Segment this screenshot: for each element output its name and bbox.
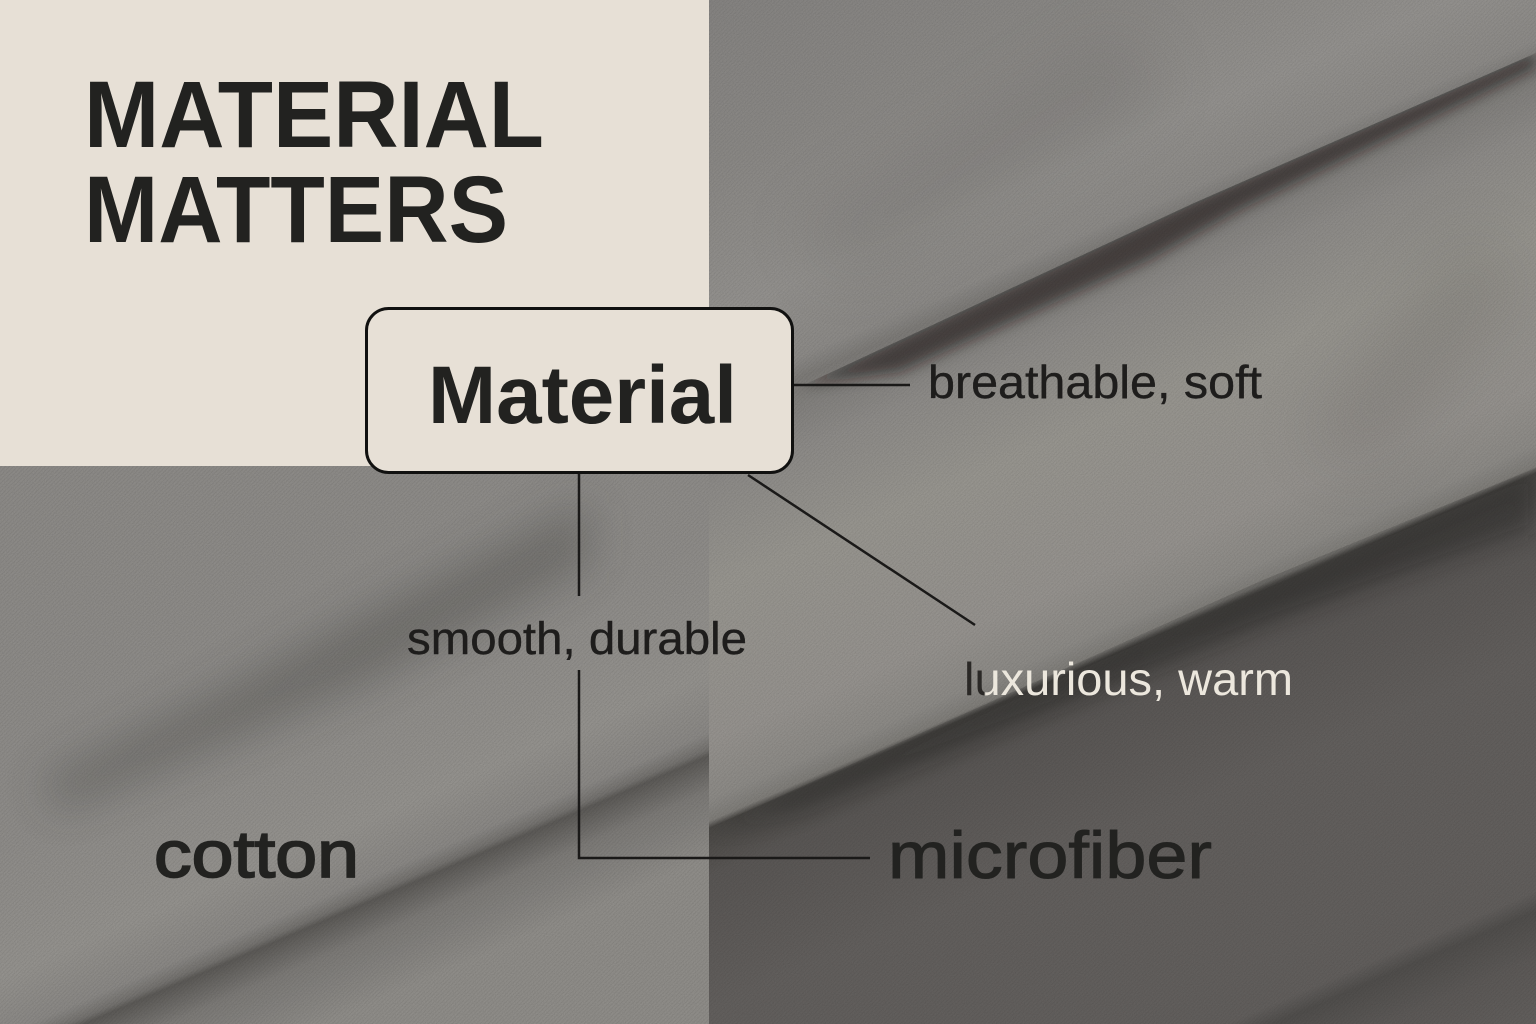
soft folds on right fabric	[866, 89, 1479, 422]
label: microfiber: microfiber	[888, 818, 1212, 892]
central label box	[366, 308, 792, 472]
panel: title background	[0, 0, 709, 466]
connector: to smooth, durable	[578, 473, 580, 596]
fold shadow: microfiber crease	[768, 469, 1536, 813]
panel: cotton fabric swatch bottom left	[0, 466, 709, 1024]
title: MATERIAL	[84, 62, 544, 168]
connector: to breathable, soft	[793, 384, 910, 386]
label: breathable, soft: breathable, soft	[928, 356, 1262, 408]
panel: fabric swatch top right and microfiber	[709, 0, 1536, 1024]
connector: to microfiber	[579, 670, 870, 858]
label: smooth, durable: smooth, durable	[407, 613, 747, 664]
label: luxurious, warm: luxurious, warm	[964, 653, 1293, 705]
fold shadow: upper right crease	[800, 50, 1536, 385]
box label: Material: Material	[428, 350, 737, 441]
title: MATTERS	[84, 157, 508, 263]
label: cotton: cotton	[154, 817, 359, 891]
soft fold on cotton fabric	[40, 500, 590, 810]
connector: to luxurious, warm	[748, 475, 975, 625]
title	[84, 62, 544, 263]
